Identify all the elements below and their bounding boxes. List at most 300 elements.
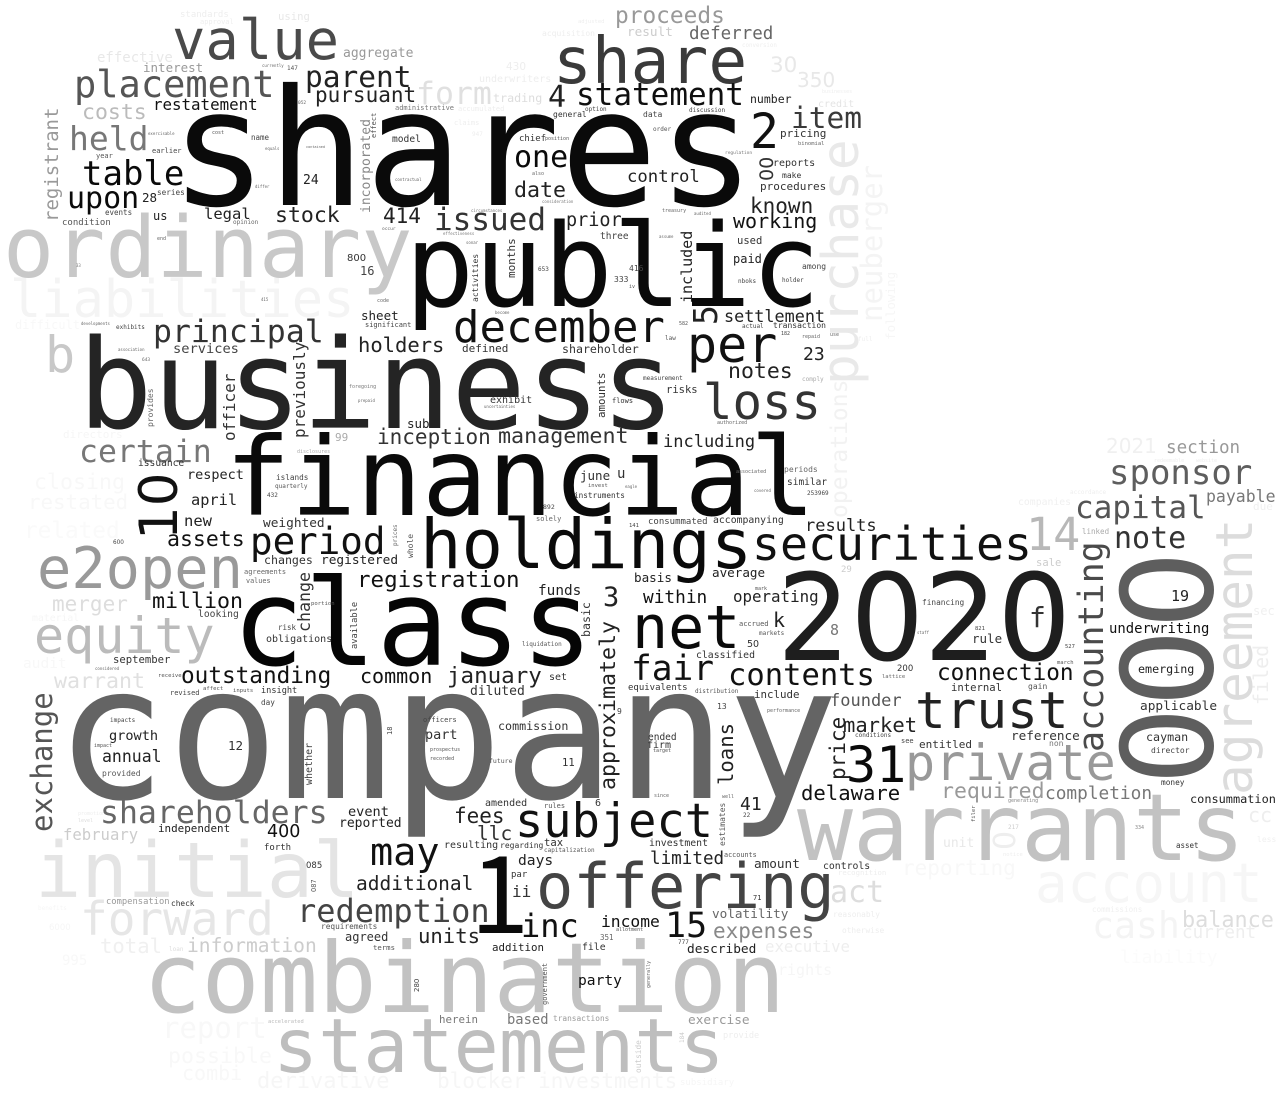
medium words: statement bbox=[576, 77, 744, 113]
small words: investment bbox=[649, 838, 708, 849]
word: e2open: e2open bbox=[37, 536, 243, 602]
word: 2: 2 bbox=[750, 104, 779, 160]
small words: 9 bbox=[617, 707, 622, 716]
medium words: underwriting bbox=[1109, 621, 1209, 637]
faint background words: trading bbox=[493, 91, 542, 105]
small words: actual bbox=[742, 323, 764, 330]
faint background words: 30 bbox=[770, 53, 797, 78]
faint background words: possible bbox=[168, 1044, 272, 1069]
small words: risk bbox=[278, 623, 297, 632]
faint background words: related bbox=[24, 518, 120, 544]
small words: days bbox=[518, 852, 553, 869]
medium words: 15 bbox=[665, 906, 707, 946]
medium words: sheet bbox=[361, 308, 399, 323]
small words: officers bbox=[423, 716, 457, 724]
medium words: outstanding bbox=[181, 663, 331, 689]
small words: ended bbox=[648, 732, 677, 743]
small words: option bbox=[585, 106, 607, 113]
small words: 821 bbox=[975, 626, 985, 632]
medium words: income bbox=[601, 912, 660, 931]
faint background words: provide bbox=[723, 1031, 759, 1041]
medium words: one bbox=[514, 140, 568, 175]
small words: filer bbox=[971, 805, 977, 822]
small words: impact bbox=[94, 743, 112, 749]
medium words: table bbox=[82, 154, 184, 194]
faint background words: 947 bbox=[472, 131, 483, 138]
medium words: proceeds bbox=[615, 3, 725, 29]
small words: outside bbox=[634, 1040, 643, 1073]
faint background words: 2021 bbox=[1106, 434, 1157, 458]
small words: reports bbox=[773, 158, 815, 169]
word: statements: statements bbox=[273, 1002, 725, 1090]
medium words: change bbox=[295, 572, 314, 632]
medium words: payable bbox=[1206, 487, 1276, 506]
word: initial: initial bbox=[35, 827, 360, 916]
medium words: delaware bbox=[801, 781, 900, 805]
small words: since bbox=[654, 793, 669, 799]
small words: exhibit bbox=[490, 395, 532, 406]
small words: 29 bbox=[841, 565, 852, 575]
faint background words: standards bbox=[180, 10, 229, 20]
medium words: incorporated bbox=[359, 119, 374, 213]
medium words: legal bbox=[204, 205, 251, 223]
small words: values bbox=[246, 577, 271, 585]
small words: registered bbox=[321, 553, 398, 568]
medium words: services bbox=[173, 341, 239, 357]
small words: 527 bbox=[1065, 644, 1075, 650]
small words: cost bbox=[212, 130, 224, 136]
small words: 24 bbox=[303, 173, 319, 188]
small words: provided bbox=[102, 769, 141, 778]
small words: binomial bbox=[798, 141, 824, 147]
small words: 8 bbox=[830, 621, 839, 639]
small words: prepaid bbox=[358, 398, 375, 403]
small words: solely bbox=[536, 515, 561, 523]
faint background words: rights bbox=[778, 961, 832, 979]
small words: periods bbox=[784, 465, 818, 474]
small words: chief bbox=[519, 134, 546, 144]
small words: defined bbox=[462, 342, 508, 355]
small words: 50 bbox=[747, 639, 759, 650]
medium words: capital bbox=[1075, 490, 1206, 526]
medium words: issued bbox=[434, 202, 546, 238]
small words: 600 bbox=[113, 540, 124, 546]
small words: equivalents bbox=[628, 683, 688, 693]
small words: government bbox=[541, 963, 549, 1005]
small words: 141 bbox=[629, 523, 639, 529]
small words: use bbox=[830, 332, 839, 338]
small words: end bbox=[157, 236, 166, 242]
word: trust: trust bbox=[915, 682, 1069, 741]
small words: diluted bbox=[470, 684, 525, 699]
small words: independent bbox=[158, 822, 230, 835]
small words: prospectus bbox=[430, 747, 460, 753]
medium words: common bbox=[360, 664, 432, 688]
small words: authorized bbox=[717, 420, 747, 426]
small words: 184 bbox=[679, 1032, 686, 1043]
medium words: k bbox=[773, 608, 785, 632]
small words: allotment bbox=[616, 927, 643, 933]
small words: flows bbox=[612, 397, 633, 405]
word: 1: 1 bbox=[470, 809, 529, 964]
small words: changes bbox=[264, 553, 313, 567]
small words: commission bbox=[498, 719, 568, 733]
small words: based bbox=[507, 1012, 549, 1028]
small words: similar bbox=[787, 477, 827, 488]
word: loss: loss bbox=[703, 374, 821, 431]
small words: equals bbox=[265, 146, 280, 151]
small words: eagle bbox=[625, 484, 638, 489]
faint background words: audit bbox=[23, 656, 67, 672]
faint background words: website bbox=[1196, 458, 1217, 464]
small words: rule bbox=[972, 631, 1002, 646]
word: forward: forward bbox=[80, 892, 274, 946]
faint background words: less bbox=[1257, 835, 1276, 844]
small words: available bbox=[350, 602, 360, 649]
small words: model bbox=[392, 134, 421, 145]
medium words: april bbox=[191, 491, 237, 509]
small words: 333 bbox=[614, 275, 629, 284]
word: 31: 31 bbox=[846, 736, 906, 794]
small words: opinion bbox=[233, 219, 259, 226]
small words: associated bbox=[736, 469, 766, 475]
medium words: prior bbox=[566, 210, 622, 231]
small words: accompanying bbox=[713, 515, 784, 526]
medium words: settlement bbox=[724, 306, 825, 326]
small words: 147 bbox=[287, 65, 298, 72]
small words: accelerated bbox=[268, 1019, 304, 1025]
word: per: per bbox=[687, 316, 777, 374]
small words: contained bbox=[306, 145, 325, 149]
small words: file bbox=[582, 942, 606, 953]
medium words: connection bbox=[937, 660, 1074, 686]
medium words: sub bbox=[407, 416, 430, 431]
small words: sonar bbox=[466, 240, 479, 245]
small words: 334 bbox=[1135, 825, 1144, 831]
medium words: upon bbox=[67, 181, 139, 216]
medium words: loans bbox=[714, 723, 738, 785]
small words: financing bbox=[922, 598, 964, 607]
small words: rules bbox=[544, 802, 565, 810]
medium words: item bbox=[791, 101, 862, 135]
small words: risks bbox=[666, 384, 698, 396]
small words: comply bbox=[802, 376, 824, 383]
small words: 22 bbox=[743, 812, 751, 819]
small words: administrative bbox=[395, 104, 454, 112]
medium words: holders bbox=[358, 333, 444, 357]
word: 2020: 2020 bbox=[777, 550, 1071, 689]
medium words: information bbox=[187, 934, 317, 957]
word: public: public bbox=[405, 200, 820, 334]
small words: staff bbox=[917, 630, 930, 635]
faint background words: material bbox=[32, 613, 79, 624]
small words: resulting bbox=[444, 840, 498, 851]
small words: order bbox=[653, 126, 671, 133]
small words: holder bbox=[782, 277, 804, 284]
medium words: within bbox=[643, 587, 707, 608]
small words: terms bbox=[373, 943, 395, 952]
small words: number bbox=[750, 92, 792, 106]
faint background words: derivative bbox=[257, 1069, 389, 1094]
small words: provides bbox=[146, 388, 155, 427]
word: company: company bbox=[55, 625, 839, 842]
medium words: expenses bbox=[713, 919, 814, 943]
faint background words: difficult bbox=[15, 318, 80, 332]
small words: distribution bbox=[695, 688, 739, 695]
medium words: additional bbox=[356, 872, 473, 895]
medium words: 23 bbox=[803, 344, 825, 365]
faint background words: reasonably bbox=[833, 910, 880, 919]
medium words: balance bbox=[1182, 908, 1274, 933]
medium words: previously bbox=[290, 341, 309, 438]
faint background words: adjusted bbox=[578, 19, 604, 25]
small words: average bbox=[712, 565, 765, 580]
medium words: parent bbox=[305, 60, 412, 94]
medium words: registration bbox=[357, 567, 520, 593]
faint background words: 995 bbox=[62, 953, 87, 969]
medium words: sponsor bbox=[1109, 453, 1252, 493]
small words: quarterly bbox=[275, 483, 308, 490]
faint background words: following bbox=[883, 272, 898, 340]
small words: effectiveness bbox=[443, 231, 475, 236]
small words: september bbox=[113, 654, 170, 666]
medium words: 400 bbox=[267, 822, 300, 842]
faint background words: loan bbox=[169, 946, 184, 953]
medium words: stock bbox=[275, 203, 340, 228]
small words: exhibits bbox=[116, 324, 145, 331]
faint background words: conversion bbox=[742, 43, 777, 49]
small words: conditions bbox=[855, 732, 892, 739]
small words: generally bbox=[646, 961, 652, 988]
faint background words: companies bbox=[1018, 497, 1071, 508]
small words: data bbox=[643, 110, 662, 119]
small words: lattice bbox=[882, 674, 905, 680]
small words: also bbox=[532, 171, 544, 177]
faint background words: redeemable bbox=[1154, 458, 1184, 464]
small words: interest bbox=[143, 60, 203, 75]
medium words: working bbox=[733, 209, 817, 233]
faint background words: notice bbox=[1003, 852, 1023, 858]
faint background words: subsidiary bbox=[680, 1078, 735, 1088]
small words: march bbox=[1057, 660, 1074, 666]
medium words: exchange bbox=[25, 692, 59, 832]
small words: director bbox=[1151, 746, 1190, 755]
medium words: included bbox=[678, 231, 696, 303]
small words: asset bbox=[1176, 841, 1199, 850]
faint background words: claims bbox=[454, 119, 479, 127]
small words: applicable bbox=[1140, 699, 1217, 714]
small words: basic bbox=[579, 602, 593, 637]
word: holdings: holdings bbox=[420, 505, 752, 585]
small words: months bbox=[505, 238, 518, 278]
medium words: date bbox=[514, 178, 566, 203]
small words: reference bbox=[1011, 728, 1080, 743]
small words: 416 bbox=[629, 264, 644, 273]
small words: receive bbox=[158, 673, 182, 679]
word: 14: 14 bbox=[1026, 508, 1080, 561]
small words: three bbox=[600, 231, 629, 242]
medium words: deferred bbox=[689, 24, 773, 44]
medium words: contents bbox=[728, 658, 875, 693]
small words: association bbox=[118, 347, 145, 352]
faint background words: 6000 bbox=[49, 923, 71, 933]
medium words: redemption bbox=[297, 892, 490, 930]
small words: agreements bbox=[244, 568, 286, 576]
small words: us bbox=[153, 209, 167, 223]
small words: 33 bbox=[76, 263, 81, 268]
word: combination: combination bbox=[143, 922, 785, 1035]
small words: position bbox=[545, 136, 569, 142]
small words: day bbox=[261, 698, 275, 707]
medium words: shareholders bbox=[100, 795, 328, 831]
small words: issuance bbox=[138, 458, 184, 469]
word: business: business bbox=[78, 314, 675, 458]
small words: regulation bbox=[725, 150, 752, 156]
word: share: share bbox=[553, 24, 747, 99]
faint background words: sec bbox=[1253, 604, 1275, 618]
medium words: new bbox=[184, 512, 213, 530]
faint background words: acquisition bbox=[542, 29, 595, 38]
small words: 643 bbox=[142, 357, 150, 363]
faint background words: executive bbox=[765, 937, 850, 956]
medium words: warrant bbox=[54, 669, 145, 694]
medium words: act bbox=[830, 875, 884, 910]
small words: obligations bbox=[266, 634, 332, 645]
faint background words: form bbox=[416, 76, 492, 112]
small words: earlier bbox=[152, 147, 182, 155]
faint background words: commissions bbox=[1092, 905, 1142, 914]
small words: 052 bbox=[298, 100, 306, 106]
faint background words: approval bbox=[200, 18, 234, 26]
faint background words: accumulated bbox=[458, 105, 504, 113]
small words: 653 bbox=[538, 266, 549, 273]
small words: gain bbox=[1028, 682, 1047, 691]
small words: performance bbox=[767, 708, 800, 714]
medium words: note bbox=[1114, 521, 1186, 556]
small words: occur bbox=[382, 227, 396, 232]
word: accounting: accounting bbox=[1072, 541, 1112, 752]
small words: part bbox=[425, 727, 458, 743]
small words: discussion bbox=[689, 107, 726, 114]
faint background words: full bbox=[858, 336, 873, 343]
small words: future bbox=[489, 757, 513, 765]
medium words: 5 bbox=[686, 305, 725, 325]
small words: herein bbox=[439, 1013, 478, 1026]
small words: accrued bbox=[739, 620, 769, 628]
word: shares: shares bbox=[170, 56, 755, 244]
small words: paid bbox=[733, 252, 762, 266]
faint background words: cash bbox=[1092, 904, 1180, 947]
small words: affect bbox=[203, 686, 223, 692]
small words: volatility bbox=[712, 906, 789, 921]
small words: looking bbox=[198, 609, 239, 620]
faint background words: directors bbox=[63, 428, 123, 441]
medium words: placement bbox=[74, 63, 274, 106]
small words: addition bbox=[492, 941, 544, 954]
small words: agreed bbox=[345, 930, 388, 944]
medium words: notes bbox=[728, 359, 793, 384]
small words: non bbox=[1049, 739, 1064, 748]
small words: audited bbox=[694, 211, 711, 216]
faint background words: using bbox=[278, 11, 310, 23]
medium words: including bbox=[663, 432, 755, 452]
word: financial: financial bbox=[225, 414, 816, 541]
small words: disclosures bbox=[297, 449, 330, 455]
faint background words: underwriters bbox=[479, 74, 551, 85]
small words: capitalization bbox=[544, 847, 595, 854]
small words: described bbox=[687, 942, 756, 957]
small words: iv bbox=[629, 284, 635, 290]
small words: money bbox=[1161, 778, 1185, 787]
word: equity: equity bbox=[34, 607, 215, 665]
small words: contractual bbox=[395, 177, 422, 182]
medium words: known bbox=[750, 194, 813, 218]
medium words: operating bbox=[733, 587, 819, 606]
small words: events bbox=[105, 208, 132, 217]
faint background words: credit bbox=[818, 99, 854, 110]
word: class: class bbox=[232, 555, 593, 694]
medium words: completion bbox=[1045, 783, 1152, 804]
medium words: control bbox=[627, 167, 700, 187]
word: b: b bbox=[45, 326, 75, 384]
medium words: officer bbox=[220, 373, 239, 441]
small words: set bbox=[549, 672, 567, 683]
faint background words: recognition bbox=[838, 868, 886, 877]
small words: year bbox=[96, 152, 113, 160]
small words: transactions bbox=[553, 1014, 609, 1023]
small words: effect bbox=[370, 113, 378, 138]
small words: developments bbox=[81, 321, 110, 326]
small words: insight bbox=[261, 686, 297, 696]
small words: aggregate bbox=[343, 46, 414, 61]
faint background words: operations bbox=[827, 380, 853, 518]
small words: 18 bbox=[386, 727, 394, 735]
faint background words: promotion bbox=[78, 811, 105, 817]
faint background words: accordance bbox=[1070, 489, 1107, 496]
medium words: f bbox=[1029, 601, 1046, 634]
small words: foregoing bbox=[349, 384, 376, 390]
small words: measurement bbox=[643, 375, 683, 382]
small words: u bbox=[617, 466, 625, 482]
small words: recorded bbox=[430, 756, 454, 762]
faint background words: account bbox=[1035, 852, 1263, 915]
small words: 19 bbox=[1171, 587, 1189, 605]
medium words: market bbox=[843, 713, 917, 737]
small words: consummated bbox=[648, 517, 708, 527]
small words: june bbox=[580, 468, 610, 483]
word: securities: securities bbox=[752, 517, 1032, 571]
faint background words: 0 bbox=[988, 831, 1023, 850]
small words: 415 bbox=[261, 297, 269, 302]
medium words: price bbox=[826, 717, 850, 780]
small words: used bbox=[737, 235, 762, 247]
faint background words: 430 bbox=[506, 61, 526, 73]
faint background words: filed bbox=[1249, 645, 1273, 705]
small words: make bbox=[782, 171, 801, 180]
small words: whether bbox=[304, 743, 315, 785]
small words: amounts bbox=[595, 372, 608, 418]
small words: 280 bbox=[413, 979, 421, 992]
small words: reported bbox=[339, 816, 402, 831]
small words: consummation bbox=[1190, 792, 1276, 806]
medium words: results bbox=[805, 516, 877, 536]
small words: 16 bbox=[360, 264, 374, 278]
word: ordinary: ordinary bbox=[3, 199, 412, 298]
word: offering: offering bbox=[536, 850, 835, 923]
medium words: limited bbox=[650, 849, 724, 869]
small words: 6 bbox=[595, 798, 601, 809]
small words: considered bbox=[95, 666, 120, 671]
